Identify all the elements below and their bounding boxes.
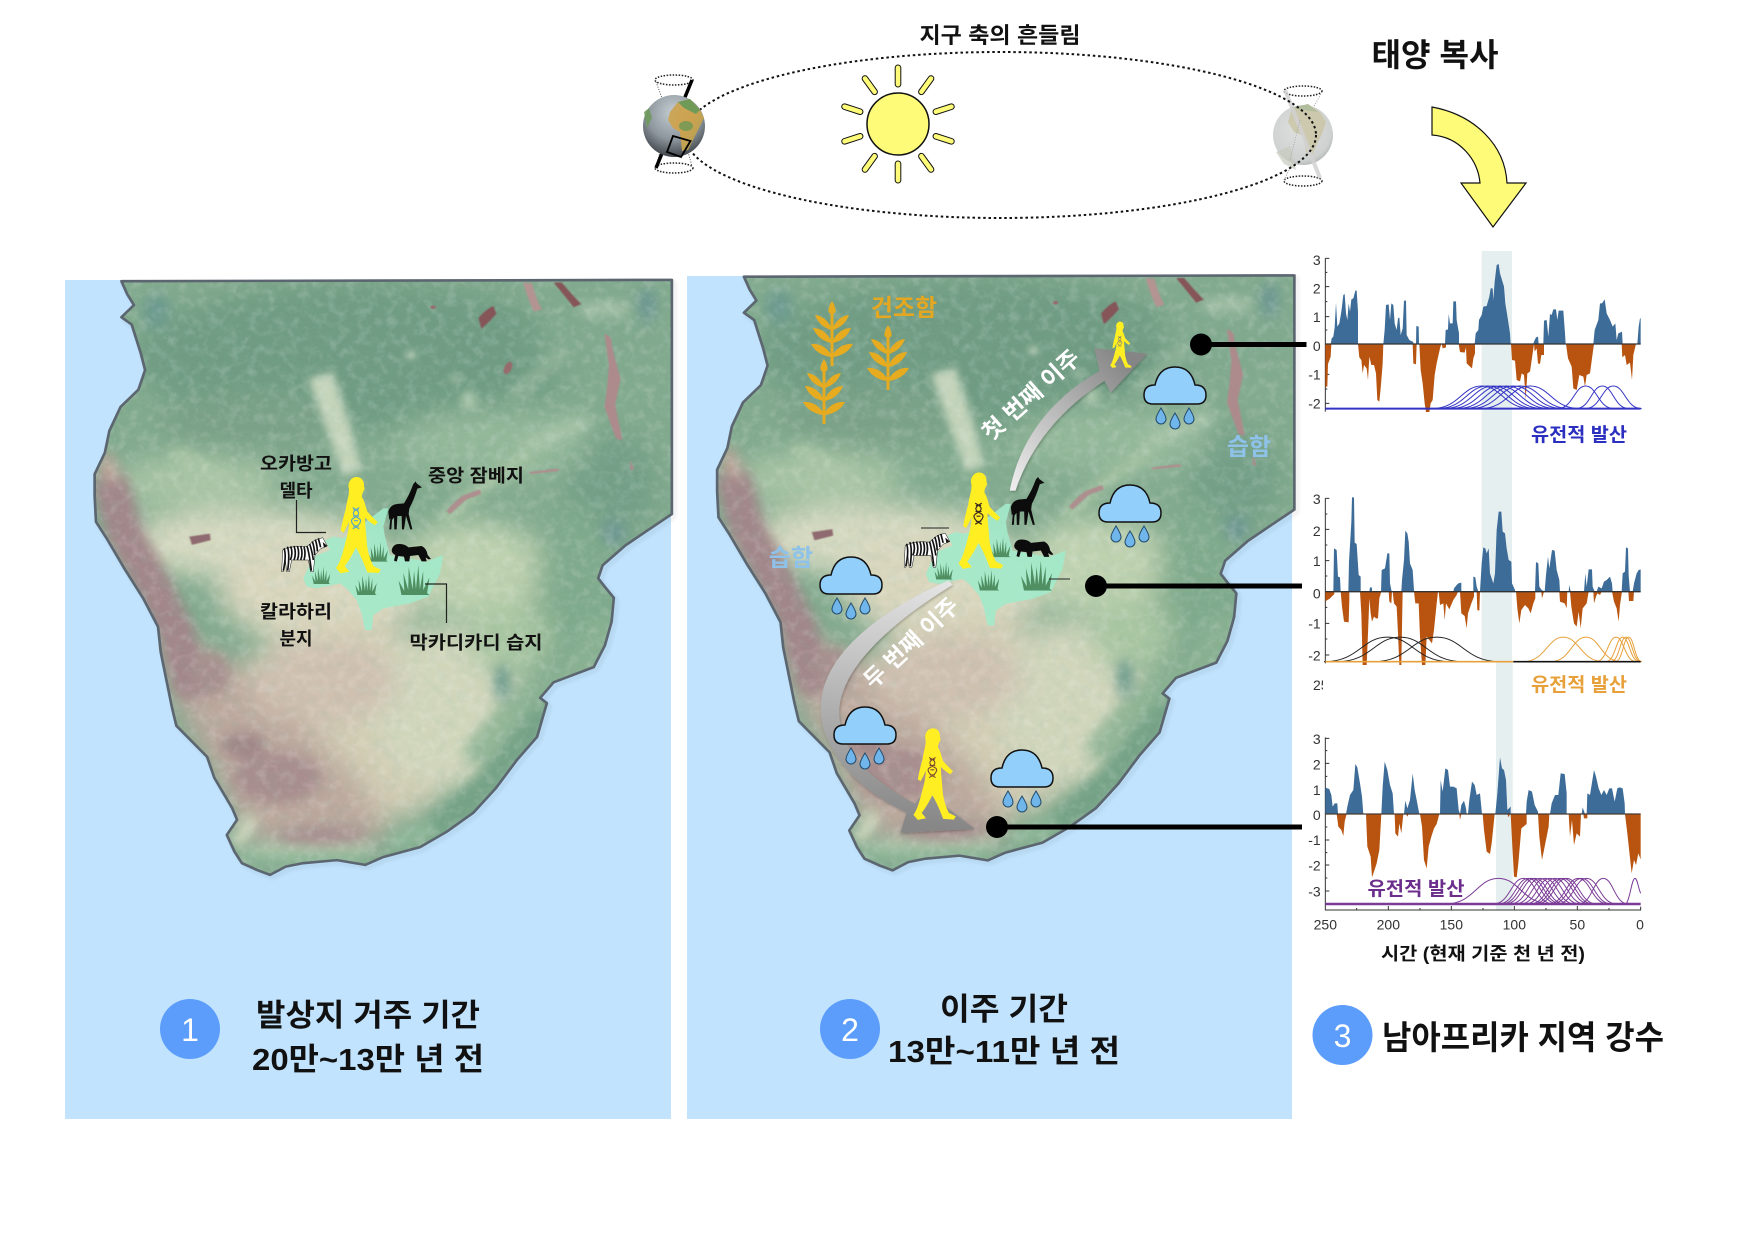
chart: rainfall north [1308,252,1642,412]
number badge 2: 2 [841,1012,859,1048]
x axis labels: 0 [1636,916,1644,932]
label: second migration: 두 번째 이주 [858,593,964,693]
chart: rainfall south: -1 [1308,832,1321,848]
icon: DNA helix [352,508,360,529]
number badge 3: 3 [1334,1018,1351,1054]
label: wet east: 습함 [1227,434,1271,461]
label: Kalahari basin: 칼라하리 [260,602,332,622]
chart: rainfall south: 2 [1313,756,1321,772]
chart: rainfall central: 1 [1313,553,1321,569]
clipped axis fragment: 25 [1313,677,1329,693]
number badge 2 [820,999,880,1059]
label: Kalahari basin [260,602,332,649]
panel: migration period [687,270,1301,1119]
label: genetic divergence, blue: 유전적 발산 [1531,424,1627,446]
number badge 1: 1 [181,1012,199,1048]
chart: rainfall north: -1 [1308,366,1321,382]
x axis labels: 150 [1440,916,1463,932]
chart: rainfall north: -2 [1308,395,1321,411]
connector: central dot [1085,575,1302,597]
number badge 3 [1312,1005,1372,1065]
chart: rainfall south: -2 [1308,858,1321,874]
map: southern Africa terrain [80,275,679,882]
heading: origin period: 20만~13만 년 전 [252,1042,484,1077]
label: genetic divergence, orange: 유전적 발산 [1531,674,1627,696]
icon: DNA helix [974,503,983,524]
panel: origin period [65,275,679,1119]
connector: north dot [1190,334,1306,356]
genetic divergence curves: black and orange [1324,637,1642,662]
heading: regional rainfall: 남아프리카 지역 강수 [1382,1019,1664,1056]
globe: right [1273,86,1333,186]
heading: origin period [252,998,484,1077]
woman: north-east [1110,322,1132,368]
map: southern Africa terrain [703,270,1301,877]
chart: rainfall south: 0 [1313,807,1321,823]
globe: left [643,75,705,173]
label: wet west: 습함 [769,545,813,572]
label: Makgadikgadi wetland: 막카디카디 습지 [410,633,542,653]
plants: dry region [803,301,909,424]
x axis labels: 50 [1570,916,1585,932]
leader lines [296,500,446,623]
orbit: dotted ellipse [685,52,1316,218]
title: axial wobble: 지구 축의 흔들림 [920,23,1080,48]
heading: migration period [888,992,1120,1069]
genetic divergence curves: purple [1325,878,1641,904]
x axis labels: 200 [1377,916,1400,932]
label: Okavango delta: 오카방고 [260,454,332,474]
chart: rainfall south [1308,731,1644,932]
x axis labels [1314,916,1644,932]
chart: rainfall central [1308,491,1642,665]
wetland with woman and animals [904,472,1066,625]
arrow: first migration [1010,348,1147,491]
heading: migration period: 13만~11만 년 전 [888,1034,1120,1069]
chart: rainfall south: 1 [1313,782,1321,798]
chart: rainfall central: -2 [1308,648,1321,664]
icon: sun [841,65,955,183]
chart: rainfall north: 3 [1313,252,1321,268]
label: central Zambezi: 중앙 잠베지 [428,466,524,486]
chart: rainfall central: 0 [1313,586,1321,602]
genetic divergence curves: blue [1325,386,1642,409]
chart: rainfall north: 1 [1313,309,1321,325]
chart: rainfall central: 3 [1313,491,1321,507]
x axis labels: 250 [1314,916,1337,932]
rain clouds [820,367,1206,812]
x axis title: 시간 (현재 기준 천 년 전) [1381,944,1585,964]
x axis labels: 100 [1503,916,1526,932]
homeland wetland with woman and animals [282,477,443,630]
chart: rainfall south: -3 [1308,884,1321,900]
chart: rainfall north: 2 [1313,280,1321,296]
arrow: second migration [821,580,975,833]
heading: origin period: 발상지 거주 기간 [256,998,480,1033]
heading: migration period: 이주 기간 [940,992,1068,1027]
label: dry: 건조함 [871,295,937,322]
label: Okavango delta: 델타 [279,481,313,501]
chart: rainfall central: 2 [1313,523,1321,539]
title: solar radiation: 태양 복사 [1372,37,1498,73]
chart: rainfall central: -1 [1308,615,1321,631]
arrow: solar radiation [1432,107,1526,227]
label: first migration: 첫 번째 이주 [977,345,1085,445]
leader lines [921,528,1070,579]
connector: south dot [986,816,1302,838]
woman: south [913,728,956,820]
shaded time band [1482,251,1513,910]
chart: rainfall north: 0 [1313,338,1321,354]
label: Okavango delta [260,454,332,501]
chart: rainfall south: 3 [1313,731,1321,747]
label: Kalahari basin: 분지 [279,629,313,649]
number badge 1 [160,999,220,1059]
label: genetic divergence, purple: 유전적 발산 [1368,878,1464,900]
